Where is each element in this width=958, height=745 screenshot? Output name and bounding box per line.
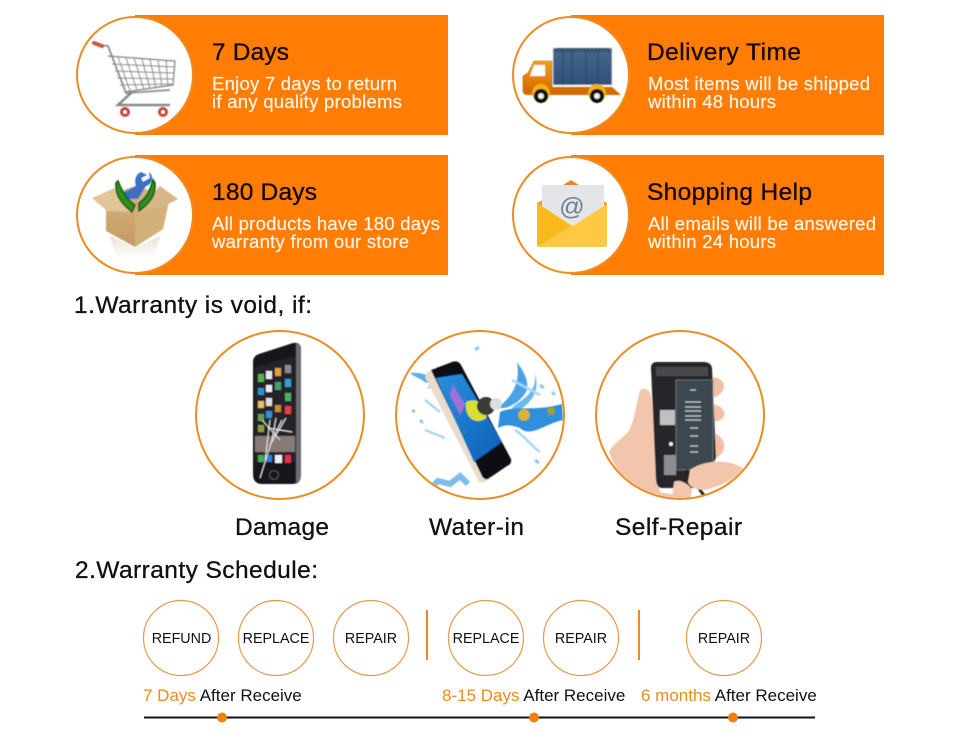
label: Water-in: Water-in: [429, 514, 524, 541]
label: 8-15 days after receive: 8-15 Days After Receive: [442, 686, 625, 705]
icon: thumb and tweezers: [672, 462, 743, 500]
text: 180 Days description: warranty from our store: [211, 231, 409, 252]
badge: replace second period: [448, 600, 524, 676]
icon: open box with wrench: [92, 172, 178, 266]
text: Shopping Help description: All emails will be answered: [648, 213, 876, 234]
heading: 7 Days: 7 Days: [212, 39, 289, 66]
badge: repair second period: [544, 600, 618, 676]
label: Self-Repair: Self-Repair: [615, 514, 742, 541]
badge: repair: [334, 600, 408, 676]
label: 7 days after receive: 7 Days After Receive: [143, 686, 302, 705]
text: 180 Days description: All products have 180 days: [212, 213, 440, 234]
panel: Damage: [196, 331, 364, 499]
panel: 7 Days: [77, 15, 448, 135]
badge: refund: [144, 600, 218, 676]
label: 6 months after receive: 6 months After Receive: [641, 686, 817, 705]
text: 7 Days description: Enjoy 7 days to return: [212, 73, 397, 94]
panel: Delivery Time: [513, 15, 884, 135]
icon: cracked phone: [253, 343, 301, 484]
divider: second period: [638, 610, 640, 660]
text: Delivery Time description: Most items will be shipped: [648, 73, 870, 94]
heading: warranty schedule: 2.Warranty Schedule:: [75, 557, 318, 584]
panel: Self-Repair: [596, 331, 764, 500]
divider: first period: [426, 610, 428, 660]
timeline: [144, 712, 815, 722]
badge: refund: REFUND: [152, 631, 211, 647]
icon: shopping cart: [94, 43, 175, 116]
panel: Water-in: [396, 331, 564, 499]
icon: envelope: [537, 180, 607, 247]
heading: 180 Days: 180 Days: [212, 179, 317, 206]
icon: splash: [410, 347, 563, 489]
icon: phone in water: [425, 361, 555, 483]
badge: replace: REPLACE: [243, 631, 309, 647]
icon: hand: [608, 388, 673, 498]
text: Shopping Help description: within 24 hours: [647, 231, 776, 252]
label: Damage: Damage: [235, 514, 329, 541]
badge: repair second period: REPAIR: [555, 631, 607, 647]
icon: fingers behind phone: [712, 377, 724, 458]
panel: Shopping Help: [513, 155, 884, 275]
icon: envelope: @: [559, 193, 585, 221]
badge: repair third period: REPAIR: [698, 631, 750, 647]
icon: truck: [523, 48, 621, 103]
badge: replace: [238, 600, 314, 676]
heading: Shopping Help: Shopping Help: [647, 179, 812, 206]
badge: replace second period: REPLACE: [453, 631, 519, 647]
heading: Delivery Time: Delivery Time: [647, 39, 801, 66]
badge: repair: REPAIR: [345, 631, 397, 647]
heading: warranty void: 1.Warranty is void, if:: [74, 292, 312, 319]
icon: open phone with battery: [651, 362, 716, 488]
text: Delivery Time description: within 48 hours: [647, 91, 776, 112]
text: 7 Days description: if any quality problems: [212, 91, 402, 112]
panel: 180 Days: [77, 155, 448, 275]
badge: repair third period: [686, 600, 762, 676]
